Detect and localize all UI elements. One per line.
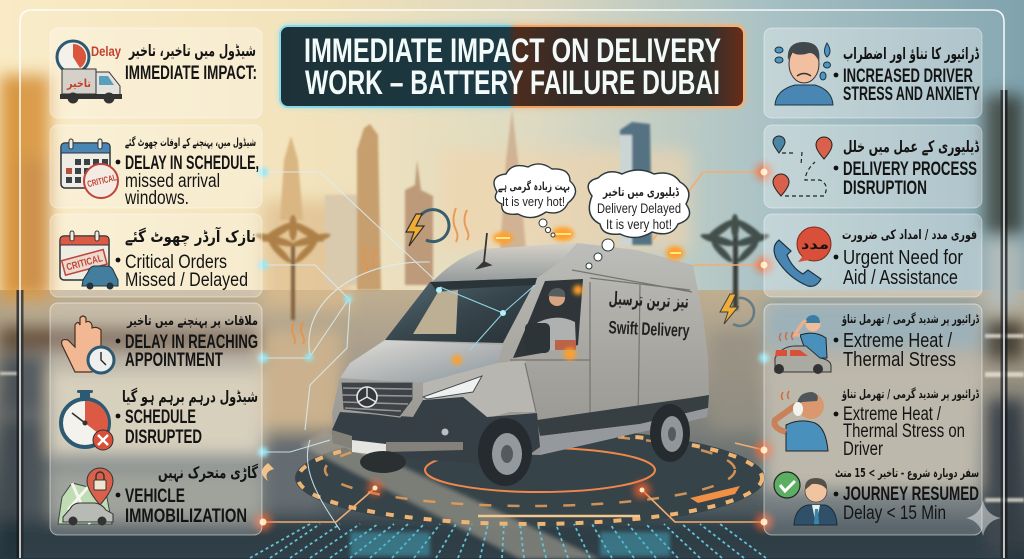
english label: schedule: DISRUPTED: [125, 427, 202, 448]
van hood: [340, 340, 503, 383]
icon: calendar with critical label and car: CRITICAL: [65, 253, 104, 273]
urdu label: appointment: ملاقات پر پہنچنے میں تاخیر: [126, 314, 258, 329]
icon: stopwatch with cross: [61, 390, 113, 450]
van plate: [352, 440, 386, 456]
english label: heat one: [843, 330, 956, 371]
icon: route pins with broken path: [773, 136, 832, 196]
icon: stressed driver: [775, 42, 833, 105]
title banner: [280, 25, 744, 107]
heat waves: [292, 208, 468, 344]
english label: [124, 153, 259, 209]
road pattern: glowing rings and circuit floor: [250, 428, 766, 559]
panel: heat, thermal stress and journey resumed: [764, 304, 982, 535]
bullet: [116, 414, 120, 418]
bullet: [116, 493, 120, 497]
van headlight: [423, 376, 482, 399]
van front fender: [423, 360, 536, 418]
english label: journey: [843, 484, 979, 524]
van side lettering: [607, 288, 691, 341]
speech bubble: it is very hot: بہت زیادہ گرمی ہے: [498, 180, 570, 193]
icon: delayed truck with clock: تاخیر: [66, 77, 91, 90]
antenna: [478, 233, 490, 268]
english label: DELAY IN SCHEDULE,: [125, 153, 259, 174]
bullet: [834, 73, 838, 77]
english label: heat one: Thermal Stress: [843, 349, 956, 371]
skyline of towers: [280, 110, 652, 290]
van roof: [432, 243, 577, 282]
urdu label: فوری مدد / امداد کی ضرورت: [842, 228, 977, 243]
urdu label: vehicle: گاڑی متحرک نہیں: [158, 463, 258, 483]
speech bubble: delivery delayed: ڈیلیوری میں تاخیر: [602, 185, 679, 200]
icon: phone with help bubble: [774, 227, 831, 286]
urdu label: شیڈول میں، پہنچنے کے اوقات چھوٹ گئے: [125, 136, 256, 149]
english label: heat two: Thermal Stress on: [843, 421, 965, 442]
urdu label: schedule: شیڈول درہم برہم ہو گیا: [122, 387, 258, 406]
van side strip: [537, 395, 709, 436]
panel: immediate impact: [50, 28, 262, 118]
delivery van: [332, 227, 709, 486]
panel: delay in schedule: [50, 125, 262, 209]
van windshield: [385, 278, 537, 350]
speech bubble: it is very hot: [494, 164, 576, 237]
english label: journey: Delay < 15 Min: [843, 503, 946, 524]
english label: appointment: APPOINTMENT: [125, 350, 223, 371]
panel: urgent aid: [764, 214, 982, 297]
van chrome bumper strip: [332, 430, 463, 452]
english label: appointment: [125, 332, 258, 371]
front wheel: [360, 418, 532, 486]
english label: heat two: Extreme Heat /: [843, 404, 942, 425]
english label: schedule: [125, 407, 202, 448]
english label: heat two: [843, 404, 965, 460]
bullet: [116, 258, 120, 262]
urdu heading: شیڈول میں تاخیر، تاخیر: [128, 41, 256, 60]
english label: appointment: DELAY IN REACHING: [125, 332, 258, 353]
bullet: [116, 160, 120, 164]
bullet: [834, 412, 838, 416]
network lines and glowing nodes: [255, 164, 772, 530]
icon: delayed truck with clock: [57, 41, 122, 104]
english label: windows.: [124, 188, 189, 209]
english label: vehicle: [125, 486, 247, 527]
english label: Missed / Delayed: [125, 270, 248, 291]
bullet: [834, 166, 838, 170]
warning lights: [452, 227, 684, 365]
van side lettering: Swift Delivery: [608, 317, 690, 341]
english label: [125, 252, 248, 291]
van side panels: [510, 270, 692, 436]
bullet: [116, 339, 120, 343]
van side lettering: تیز ترین ترسیل: [608, 288, 689, 313]
english label: vehicle: VEHICLE: [125, 486, 185, 507]
english label: Critical Orders: [125, 252, 227, 273]
icon: hand with clock: [62, 316, 114, 373]
van fog lamp: [442, 428, 448, 436]
icon: battery and clock, right: [720, 294, 754, 326]
panel: critical orders: [50, 214, 262, 297]
palm trees: [255, 214, 770, 320]
van body: [332, 243, 709, 458]
english label: Aid / Assistance: [843, 267, 958, 289]
icon: calendar with critical stamp: [61, 139, 118, 198]
speech bubble: delivery delayed: Delivery Delayed: [597, 200, 681, 216]
speech bubble: it is very hot: It is very hot!: [502, 194, 565, 209]
bullet: [834, 492, 838, 496]
van grille: [341, 382, 413, 417]
english label: heat one: Extreme Heat /: [843, 330, 952, 352]
urdu label: نازک آرڈر چھوٹ گئے: [125, 226, 256, 247]
van side window with driver: [513, 279, 583, 358]
title banner: WORK – BATTERY FAILURE DUBAI: [305, 64, 720, 102]
english label: Urgent Need for: [843, 247, 963, 269]
icon: driver wiping forehead: [774, 391, 828, 451]
panel: delivery disruption: [764, 125, 982, 208]
rear wheel: [650, 404, 690, 462]
icon: driver beside hot car: [774, 315, 831, 374]
icon: check mark and smiling man: [774, 472, 837, 525]
bullet: [834, 255, 838, 259]
panel: driver stress: [764, 28, 982, 118]
english label: [843, 159, 977, 199]
english label: vehicle: IMMOBILIZATION: [125, 506, 247, 527]
english label: heat two: Driver: [843, 439, 884, 460]
icon: delayed truck with clock: Delay: [91, 43, 121, 59]
english label: schedule: SCHEDULE: [125, 407, 196, 428]
english label: [843, 247, 963, 289]
english label: [843, 66, 980, 105]
bullet: [834, 338, 838, 342]
speech bubble: delivery delayed: [586, 170, 690, 269]
icon: sparkle: [966, 500, 1001, 536]
panel: appointment, schedule and immobilization: [50, 303, 262, 535]
icon: map, lock pin and car: [58, 468, 113, 526]
title banner: IMMEDIATE IMPACT ON DELIVERY: [304, 32, 721, 70]
speech bubble: delivery delayed: It is very hot!: [606, 216, 672, 232]
english heading: IMMEDIATE IMPACT:: [125, 63, 257, 84]
icon: calendar with critical stamp: CRITICAL: [86, 172, 118, 189]
van lower bumper: [332, 397, 540, 472]
icon: battery and clock, left: [406, 210, 449, 246]
icon: calendar with critical label and car: [60, 231, 118, 290]
english label: DISRUPTION: [843, 178, 927, 199]
icon: phone with help bubble: مدد: [801, 238, 829, 253]
english label: missed arrival: [125, 171, 220, 192]
